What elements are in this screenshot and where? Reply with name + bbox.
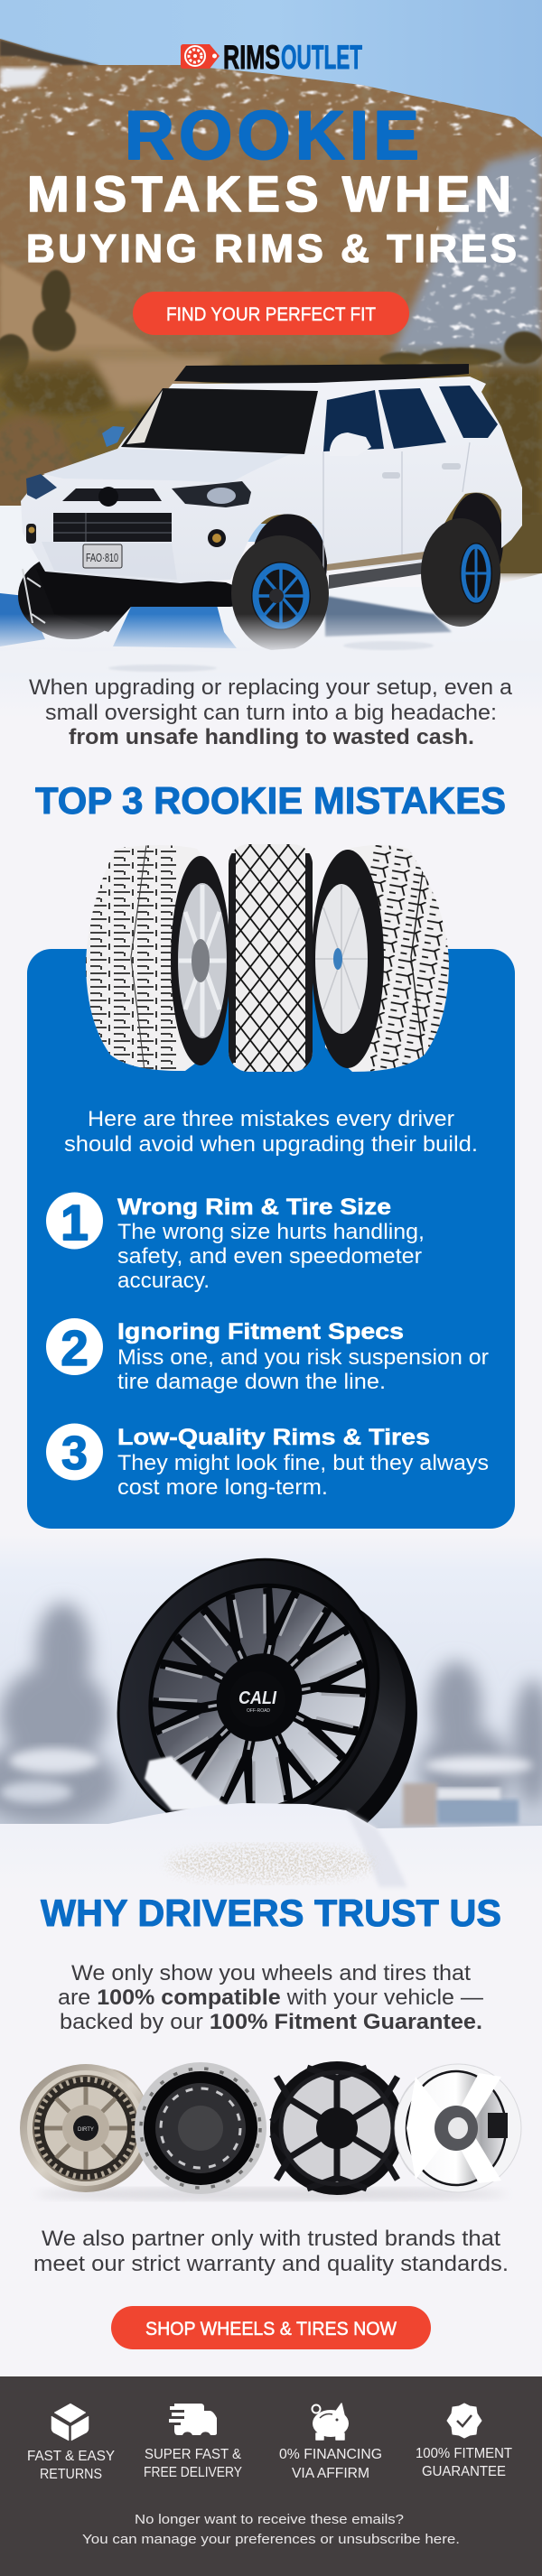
title [26, 98, 517, 271]
white SUV [18, 364, 522, 651]
wheel barrel [107, 1542, 467, 1907]
three winter tires [86, 844, 450, 1073]
snow inside wheel [145, 1756, 235, 1810]
wheel face lip [66, 1509, 431, 1883]
partner text: meet our strict warranty and quality standards. [33, 2252, 509, 2276]
panel intro text: should avoid when upgrading their build. [64, 1132, 478, 1157]
intro text [29, 675, 513, 749]
license plate: FAO·810 [86, 551, 118, 564]
icon: piggy bank [313, 2404, 349, 2440]
benefit: super fast and free delivery [144, 2404, 242, 2480]
windshield [121, 388, 318, 454]
wheel hub logo: CALI [238, 1688, 276, 1708]
row of four wheels [20, 2061, 521, 2200]
big black Cali wheel [66, 1509, 467, 1907]
snowy forest photo background [0, 1535, 542, 1833]
wheel spokes [146, 1582, 372, 1813]
center tire [229, 844, 313, 1072]
icon: check badge [447, 2404, 481, 2438]
right tire [312, 845, 450, 1073]
wheel hub logo [229, 1671, 285, 1727]
benefit: financing via affirm: VIA AFFIRM [292, 2466, 369, 2481]
left tire [86, 845, 230, 1071]
icon: box [51, 2404, 89, 2441]
unsubscribe text [82, 2512, 460, 2547]
roof rack [174, 364, 469, 386]
footer [0, 2376, 542, 2576]
wheel 1: bronze [20, 2064, 152, 2192]
mistake 2: Miss one, and you risk suspension or [117, 1345, 489, 1370]
license plate [83, 544, 122, 568]
benefit: fast and easy returns: FAST & EASY [27, 2449, 115, 2464]
partner text: We also partner only with trusted brands that [42, 2227, 500, 2251]
mistake 3: Low-Quality Rims & Tires [117, 1425, 430, 1450]
trust text [58, 1961, 483, 2034]
panel intro text [64, 1107, 478, 1157]
mistake 2 [46, 1318, 489, 1394]
rear wheel [421, 518, 500, 627]
snow mound [0, 1803, 542, 1896]
headlights [26, 474, 251, 507]
panel intro text: Here are three mistakes every driver [88, 1107, 454, 1131]
icon: number 3 [46, 1423, 103, 1481]
intro text: from unsafe handling to wasted cash. [69, 725, 474, 749]
mistake 1: safety, and even speedometer [117, 1244, 422, 1269]
hero snow ground [0, 506, 542, 659]
heading: why drivers trust us: WHY DRIVERS TRUST US [41, 1892, 501, 1934]
undercarriage [36, 569, 271, 632]
trust text: backed by our 100% Fitment Guarantee. [60, 2010, 482, 2034]
mistake 3 [46, 1423, 489, 1500]
benefit: financing via affirm [279, 2404, 382, 2481]
wheel shadows [36, 2188, 506, 2200]
unsubscribe text: You can manage your preferences or unsubscribe here. [82, 2532, 460, 2547]
benefit: fitment guarantee [416, 2404, 512, 2479]
mistake 2: tire damage down the line. [117, 1370, 386, 1394]
front grille and bumper [42, 487, 177, 580]
front wheel [231, 535, 329, 651]
benefit: fitment guarantee: GUARANTEE [422, 2464, 506, 2479]
hero photo: sky, mountain and forest [0, 0, 542, 573]
intro text: small oversight can turn into a big headache: [45, 701, 497, 725]
benefit: fast and easy returns [27, 2404, 115, 2482]
title: BUYING RIMS & TIRES [26, 227, 517, 271]
panel: three mistakes [27, 844, 515, 1529]
button: find your perfect fit [133, 292, 409, 335]
mistake 2: Ignoring Fitment Specs [117, 1319, 404, 1344]
mistake 1: Wrong Rim & Tire Size [117, 1195, 391, 1220]
button: shop wheels and tires now [111, 2306, 431, 2349]
benefit: financing via affirm: 0% FINANCING [279, 2447, 382, 2462]
mistake 1: The wrong size hurts handling, [117, 1220, 425, 1244]
intro text: When upgrading or replacing your setup, even a [29, 675, 513, 700]
front-left tire [18, 553, 126, 639]
trust text: We only show you wheels and tires that [71, 1961, 471, 1985]
wheel 2: black beadlock [135, 2062, 266, 2194]
button: find your perfect fit: FIND YOUR PERFECT FIT [166, 304, 376, 325]
mistake 1: accuracy. [117, 1269, 210, 1293]
benefit: fitment guarantee: 100% FITMENT [416, 2446, 512, 2461]
mistake 1 [46, 1192, 425, 1293]
icon: number 1: 1 [61, 1195, 89, 1251]
heading: top 3 rookie mistakes: TOP 3 ROOKIE MISTAKES [35, 779, 506, 822]
hero fade into page background [0, 614, 542, 718]
mistake 3: cost more long-term. [117, 1475, 328, 1500]
title: ROOKIE [125, 98, 419, 174]
icon: price tag wheel [181, 44, 220, 69]
mistake 3: They might look fine, but they always [117, 1451, 489, 1475]
icon: number 2 [46, 1318, 103, 1376]
logo: OUTLET [281, 39, 362, 76]
mirrors [102, 426, 371, 456]
benefit: super fast and free delivery: FREE DELIVERY [144, 2465, 242, 2480]
button: shop wheels and tires now: SHOP WHEELS & TIRES NOW [145, 2319, 397, 2339]
side windows [323, 386, 498, 451]
unsubscribe text: No longer want to receive these emails? [135, 2512, 404, 2527]
icon: number 1 [46, 1192, 103, 1251]
benefit: fast and easy returns: RETURNS [40, 2467, 102, 2482]
trust text: are 100% compatible with your vehicle — [58, 1985, 483, 2010]
logo [181, 39, 362, 76]
wheel 4: chrome [395, 2064, 521, 2192]
benefit: super fast and free delivery: SUPER FAST & [145, 2447, 241, 2462]
partner text [33, 2227, 509, 2276]
body shell [21, 377, 522, 583]
title: MISTAKES WHEN [27, 165, 511, 222]
icon: truck [169, 2404, 217, 2435]
fog lights [26, 524, 226, 547]
icon: number 2: 2 [61, 1320, 89, 1376]
wheel arches [251, 493, 503, 615]
icon: number 3: 3 [61, 1427, 88, 1480]
wheel 3: gloss black [270, 2061, 404, 2195]
hood [43, 449, 291, 483]
logo: RIMS [223, 39, 280, 76]
door details and step bar [323, 442, 470, 589]
wheel hub logo: OFF-ROAD [247, 1708, 270, 1714]
wheel 1: bronze: DIRTY [78, 2127, 94, 2133]
